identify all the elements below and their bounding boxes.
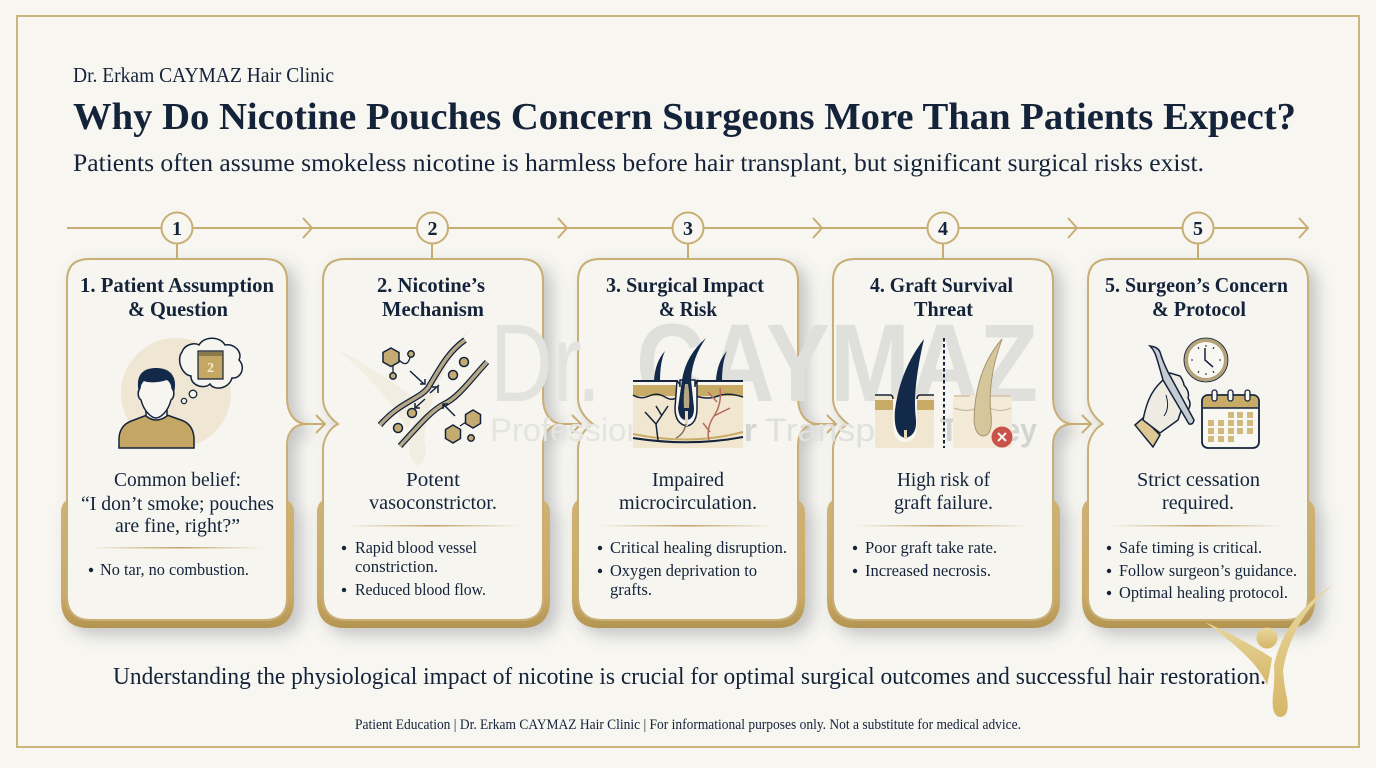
watermark text: Transplant (765, 412, 933, 448)
step 4 marker (928, 212, 958, 244)
card 5 bullets: Optimal healing protocol. (1119, 583, 1288, 602)
card 3 bullets: Oxygen deprivation to (610, 561, 757, 580)
card 1 main statement: Common belief: (114, 469, 241, 491)
card 1 shape (61, 259, 325, 628)
step 4 marker: 4 (938, 218, 948, 240)
card 2 main statement (369, 469, 497, 514)
card 5 shape (1082, 259, 1315, 628)
logo: gold figure mark (1205, 584, 1334, 717)
title: Why Do Nicotine Pouches Concern Surgeons More Than Patients Expect? (73, 96, 1296, 138)
step 1 marker: 1 (172, 218, 182, 240)
card 5 heading: & Protocol (1152, 297, 1246, 321)
card 3 main statement: Impaired (652, 469, 724, 491)
card 1 heading: 1. Patient Assumption (80, 273, 274, 297)
card 2 bullets (342, 538, 486, 599)
footer disclaimer: Patient Education | Dr. Erkam CAYMAZ Hair Clinic | For informational purposes only. Not a substitute for medical advice. (355, 717, 1021, 733)
card 1 heading: & Question (128, 297, 228, 321)
card 3 heading: 3. Surgical Impact (606, 273, 764, 297)
card 2 main statement: Potent (406, 469, 460, 491)
panel: card 4 text (853, 273, 1030, 580)
card 3 bullets: Critical healing disruption. (610, 538, 787, 557)
card 2 heading (377, 273, 485, 321)
step 2 marker (417, 212, 448, 244)
card 5 bullets: Safe timing is critical. (1119, 538, 1262, 557)
card 5 main statement (1137, 469, 1260, 514)
card 5 bullets: Follow surgeon’s guidance. (1119, 561, 1297, 580)
card 5 main statement: required. (1162, 492, 1234, 514)
panel: card 1 text (80, 273, 274, 579)
panel: card 3 text (598, 273, 787, 599)
card 1 main statement: are fine, right?” (115, 515, 240, 537)
watermark text: Turkey (940, 412, 1037, 448)
step 3 marker (672, 212, 704, 244)
icon: healthy graft versus failed graft (875, 338, 1012, 448)
watermark text (490, 302, 1038, 448)
card 5 heading (1105, 273, 1288, 321)
card 3 main statement: microcirculation. (619, 492, 757, 514)
card 1 main statement: “I don’t smoke; pouches (81, 493, 274, 515)
card 1 main statement (81, 469, 274, 537)
icon: constricted blood vessel and nicotine molecules (380, 340, 487, 446)
step 5 marker: 5 (1193, 218, 1203, 240)
step 3 marker: 3 (683, 218, 693, 240)
card 3 bullets (598, 538, 787, 599)
step 1 marker (162, 212, 192, 244)
card 2 bullets: constriction. (355, 557, 438, 576)
card 3 main statement (619, 469, 757, 514)
card 4 main statement: graft failure. (894, 492, 993, 514)
watermark text: Hair (690, 412, 757, 448)
icon: skin cross-section with hair follicles (633, 338, 743, 448)
icon: gloved hand with tweezers, clock and calendar (1135, 338, 1259, 448)
card 5 bullets (1107, 538, 1297, 602)
card 3 bullets: grafts. (610, 580, 652, 599)
timeline with numbered steps (67, 212, 1308, 259)
panel: card 2 text (342, 273, 520, 599)
card 3 shape (572, 259, 836, 628)
card 2 bullets: Rapid blood vessel (355, 538, 477, 557)
subtitle: Patients often assume smokeless nicotine is harmless before hair transplant, but significant surgical risks exist. (73, 148, 1204, 177)
step 5 marker (1182, 212, 1214, 244)
card 4 main statement: High risk of (897, 469, 990, 491)
card 5 heading: 5. Surgeon’s Concern (1105, 273, 1288, 297)
card shapes (61, 259, 1315, 628)
card 2 heading: Mechanism (382, 297, 484, 321)
card 4 bullets: Increased necrosis. (865, 561, 991, 580)
card 2 bullets: Reduced blood flow. (355, 580, 486, 599)
clinic name: Dr. Erkam CAYMAZ Hair Clinic (73, 63, 334, 87)
watermark logo, faded (338, 322, 476, 466)
icon: patient thinking about a pouch (119, 338, 242, 448)
card 5 main statement: Strict cessation (1137, 469, 1260, 491)
card 3 heading: & Risk (659, 297, 717, 321)
card 2 shape (317, 259, 581, 628)
card 4 heading: 4. Graft Survival (870, 273, 1013, 297)
card 1 bullet: No tar, no combustion. (100, 560, 249, 579)
card 2 main statement: vasoconstrictor. (369, 492, 497, 514)
card 4 heading (870, 273, 1013, 321)
card 3 heading (606, 273, 764, 321)
card 2 heading: 2. Nicotine’s (377, 273, 485, 297)
icon: patient thinking about a pouch: 2 (207, 361, 214, 376)
step 2 marker: 2 (428, 218, 438, 240)
watermark text: Dr. (490, 302, 601, 425)
watermark text: Professional (490, 412, 670, 448)
watermark text: CAYMAZ (636, 302, 1038, 425)
card 1 heading (80, 273, 274, 321)
card 4 shape (827, 259, 1091, 628)
card 4 bullets (853, 538, 997, 580)
closing statement: Understanding the physiological impact of nicotine is crucial for optimal surgical outcomes and successful hair restoration. (113, 664, 1266, 690)
card 4 heading: Threat (914, 297, 973, 321)
card 4 bullets: Poor graft take rate. (865, 538, 997, 557)
card 4 main statement (894, 469, 993, 514)
panel: card 5 text (1105, 273, 1297, 602)
